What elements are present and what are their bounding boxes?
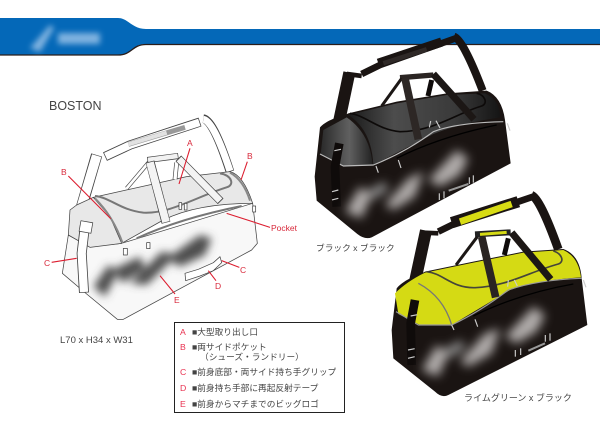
callout letters: C [44,258,50,268]
handles [82,156,221,293]
shoulder strap [82,119,230,207]
bag body [62,203,257,319]
legend D: D [180,383,186,393]
zip pocket [137,206,242,238]
straps [338,37,483,125]
black bag [315,37,511,238]
legend C: ■前身底部・両サイド持ち手グリップ [192,367,336,377]
body [392,249,587,396]
header band [0,18,600,55]
top panel [93,172,253,243]
handles [335,74,474,207]
zipper curve [350,93,485,132]
legend A: A [180,327,186,337]
callout letters: B [61,167,67,177]
lime bag [392,195,587,396]
line drawing bag [52,119,270,319]
side strap [82,225,85,293]
legend B: （シューズ・ランドリー） [200,352,304,362]
heading: BOSTON: BOSTON [49,99,102,113]
zip pulls and grips [332,121,510,200]
body [315,91,511,238]
legend E: ■前身からマチまでのビッグロゴ [192,399,319,409]
front grip [185,257,222,281]
callout letters: D [215,281,221,291]
legend E: E [180,399,186,409]
caption: black: ブラック x ブラック [316,243,395,253]
callout letters: A [187,138,193,148]
side strap [335,143,339,207]
blurred logo [345,150,468,218]
legend box [174,322,345,413]
callout letters: Pocket [271,223,298,233]
caption: lime: ライムグリーン x ブラック [464,393,572,403]
callout letters [44,138,298,305]
blurred logo [30,25,100,52]
callout letters: E [174,295,180,305]
buckle [79,221,93,233]
handles [411,232,551,365]
blurred logo [422,307,545,377]
callout letters: C [240,265,246,275]
blurred logo [93,235,212,297]
legend D: ■前身持ち手部に再起反射テープ [192,383,318,393]
red callout lines [52,148,270,294]
callout letters: B [247,151,253,161]
left zipper [95,198,123,243]
dimensions: L70 x H34 x W31 [60,335,133,346]
seams [427,251,562,288]
zipper curve [95,173,231,213]
legend A: ■大型取り出し口 [192,327,258,337]
legend B: B [180,342,186,352]
zip pulls and grips [408,280,586,358]
legend B [180,342,304,362]
legend B: ■両サイドポケット [192,342,267,352]
straps [415,195,558,282]
yellow top [395,250,581,325]
legend C: C [180,367,186,377]
side strap [411,300,415,365]
top panel sheen [348,93,500,165]
silver trim [320,122,503,166]
left end panel [68,197,122,247]
zip pulls [123,203,256,255]
